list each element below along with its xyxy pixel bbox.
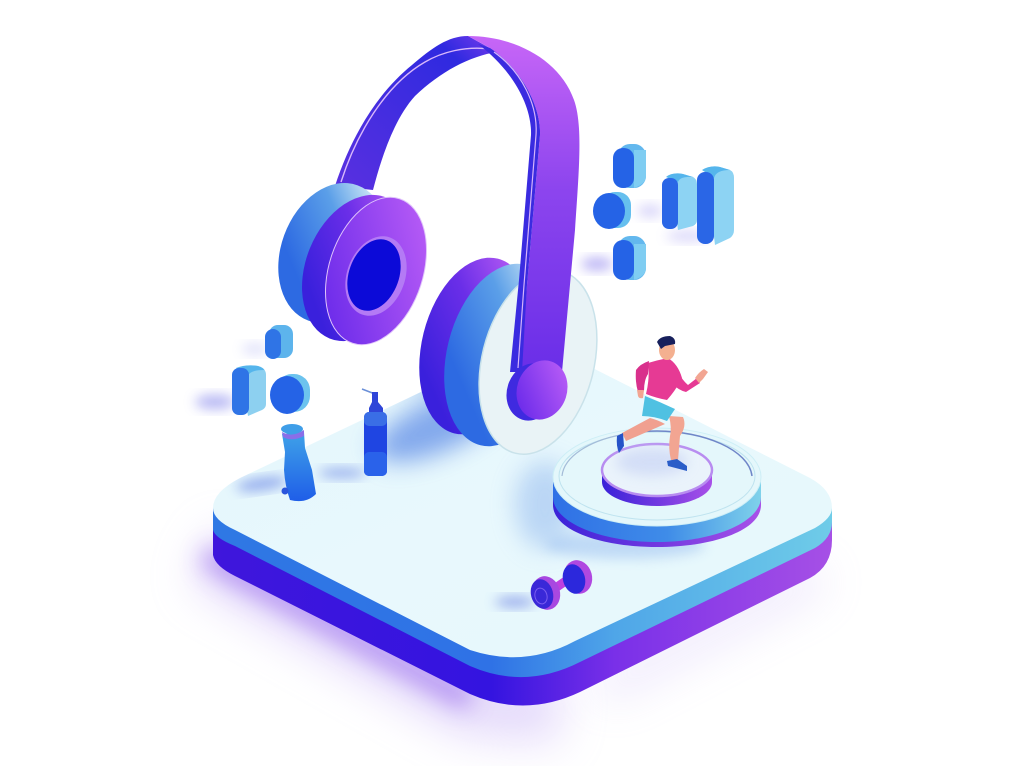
purple face (308, 184, 444, 358)
blue side (553, 482, 761, 542)
back leg (622, 418, 665, 441)
block: tall (232, 365, 266, 416)
left bottle (281, 424, 316, 501)
small disc (602, 444, 712, 506)
hair (657, 336, 675, 349)
right ear cup (402, 246, 615, 467)
block: bottom (613, 236, 646, 280)
blue middle side (426, 251, 580, 459)
right bottle (362, 389, 387, 476)
band inner edge (478, 44, 540, 372)
band front face (468, 36, 579, 372)
floating block shadows (195, 205, 710, 409)
headband underside (335, 36, 497, 190)
white face (461, 257, 615, 467)
block: tall small (662, 173, 697, 230)
disc top (553, 428, 761, 526)
back shoe (617, 433, 624, 453)
illustration: headphones on a fitness platform (182, 36, 832, 755)
platform base (213, 345, 832, 706)
head (659, 340, 675, 360)
purple base layer (213, 508, 832, 706)
dumbbell (527, 557, 596, 613)
purple side (281, 178, 435, 358)
front arm (673, 370, 700, 392)
top surface (213, 345, 832, 657)
hole rim (335, 228, 417, 324)
ear cup hub (499, 354, 575, 427)
shorts (642, 396, 675, 421)
torso (646, 358, 682, 400)
block: small (265, 325, 293, 359)
left ear cup (260, 168, 444, 358)
block: tall large (697, 166, 734, 245)
back arm (636, 361, 649, 392)
blue middle layer (213, 508, 832, 677)
front shoe (667, 459, 687, 471)
left floating blocks (232, 325, 310, 416)
platform ground shadow (205, 555, 820, 712)
outer blue ring (260, 168, 406, 338)
shadows on platform (232, 392, 707, 612)
top right floating blocks (593, 144, 734, 280)
headband front (468, 36, 579, 372)
disc ring (559, 432, 755, 520)
block: top (613, 144, 646, 188)
purple outer side (402, 246, 550, 446)
runner (617, 336, 708, 471)
block: middle (593, 192, 631, 229)
purple rim (553, 482, 761, 547)
hole (338, 232, 410, 318)
front leg (669, 416, 684, 460)
block: round (270, 374, 310, 414)
large disc (553, 428, 761, 547)
